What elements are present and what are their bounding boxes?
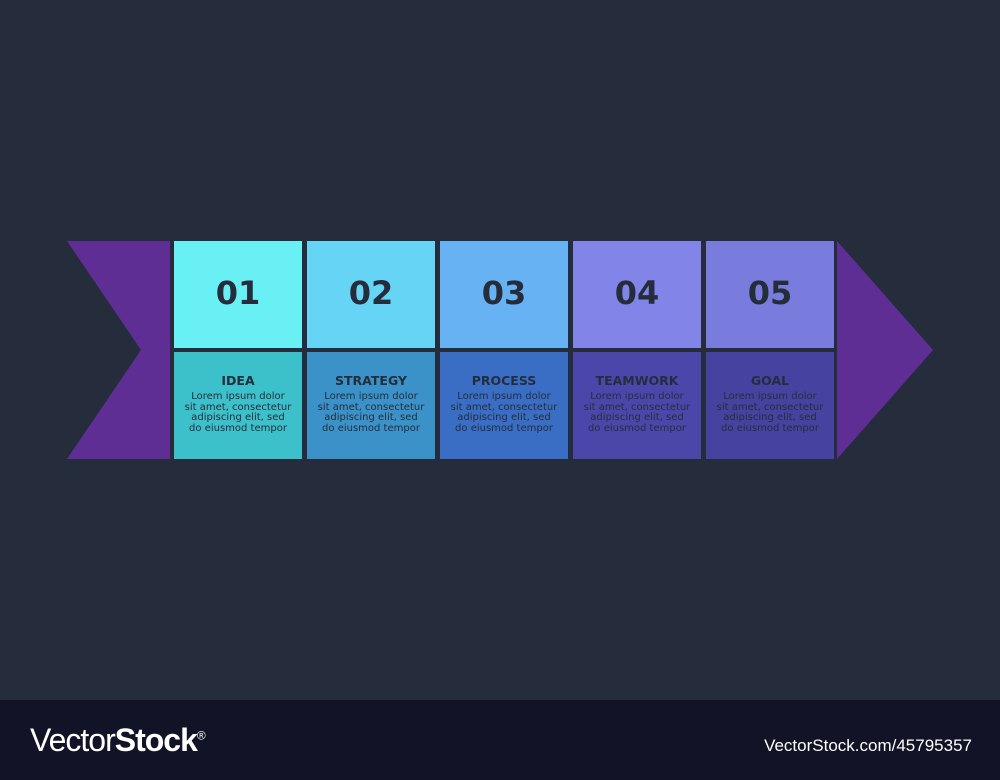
step 4 text: do eiusmod tempor — [588, 423, 686, 434]
step 2 number — [307, 241, 435, 348]
footer logo: VectorStock® — [30, 722, 205, 758]
footer bar — [0, 700, 1000, 780]
step 2 text: do eiusmod tempor — [322, 423, 420, 434]
step 1 number — [174, 241, 302, 348]
step 4 number — [573, 241, 701, 348]
footer id: VectorStock.com/45795357 — [764, 736, 972, 755]
step 5 text: do eiusmod tempor — [721, 423, 819, 434]
step 5 text: GOAL — [751, 373, 789, 388]
step 3 text: Lorem ipsum dolor — [457, 391, 551, 402]
step 4 text: TEAMWORK — [596, 373, 678, 388]
step 3 text: do eiusmod tempor — [455, 423, 553, 434]
step 5 text: adipiscing elit, sed — [723, 412, 817, 423]
step 2 text: sit amet, consectetur — [318, 402, 424, 413]
step 5 text: Lorem ipsum dolor — [723, 391, 817, 402]
step 4 text: Lorem ipsum dolor — [590, 391, 684, 402]
arrow head shape — [837, 241, 933, 459]
step 3 text: adipiscing elit, sed — [457, 412, 551, 423]
step 4 text: sit amet, consectetur — [584, 402, 690, 413]
step 4 text — [573, 352, 701, 459]
step 1 text: IDEA — [221, 373, 255, 388]
step 4 text: adipiscing elit, sed — [590, 412, 684, 423]
step 1 text: Lorem ipsum dolor — [191, 391, 285, 402]
step 2 text — [307, 352, 435, 459]
step 5 number: 05 — [748, 274, 792, 312]
step 5 text — [706, 352, 834, 459]
step 1 text: sit amet, consectetur — [185, 402, 291, 413]
step 1 text: adipiscing elit, sed — [191, 412, 285, 423]
step 3 text — [440, 352, 568, 459]
step 2 text: adipiscing elit, sed — [324, 412, 418, 423]
step 1 number: 01 — [216, 274, 260, 312]
step 2 text: Lorem ipsum dolor — [324, 391, 418, 402]
step 2 number: 02 — [349, 274, 393, 312]
step 2 text: STRATEGY — [335, 373, 407, 388]
step 3 text: sit amet, consectetur — [451, 402, 557, 413]
step 5 text: sit amet, consectetur — [717, 402, 823, 413]
step 3 number — [440, 241, 568, 348]
step 1 text — [174, 352, 302, 459]
step 5 number — [706, 241, 834, 348]
step 3 number: 03 — [482, 274, 526, 312]
step 4 number: 04 — [615, 274, 659, 312]
step 3 text: PROCESS — [472, 373, 536, 388]
step 1 text: do eiusmod tempor — [189, 423, 287, 434]
